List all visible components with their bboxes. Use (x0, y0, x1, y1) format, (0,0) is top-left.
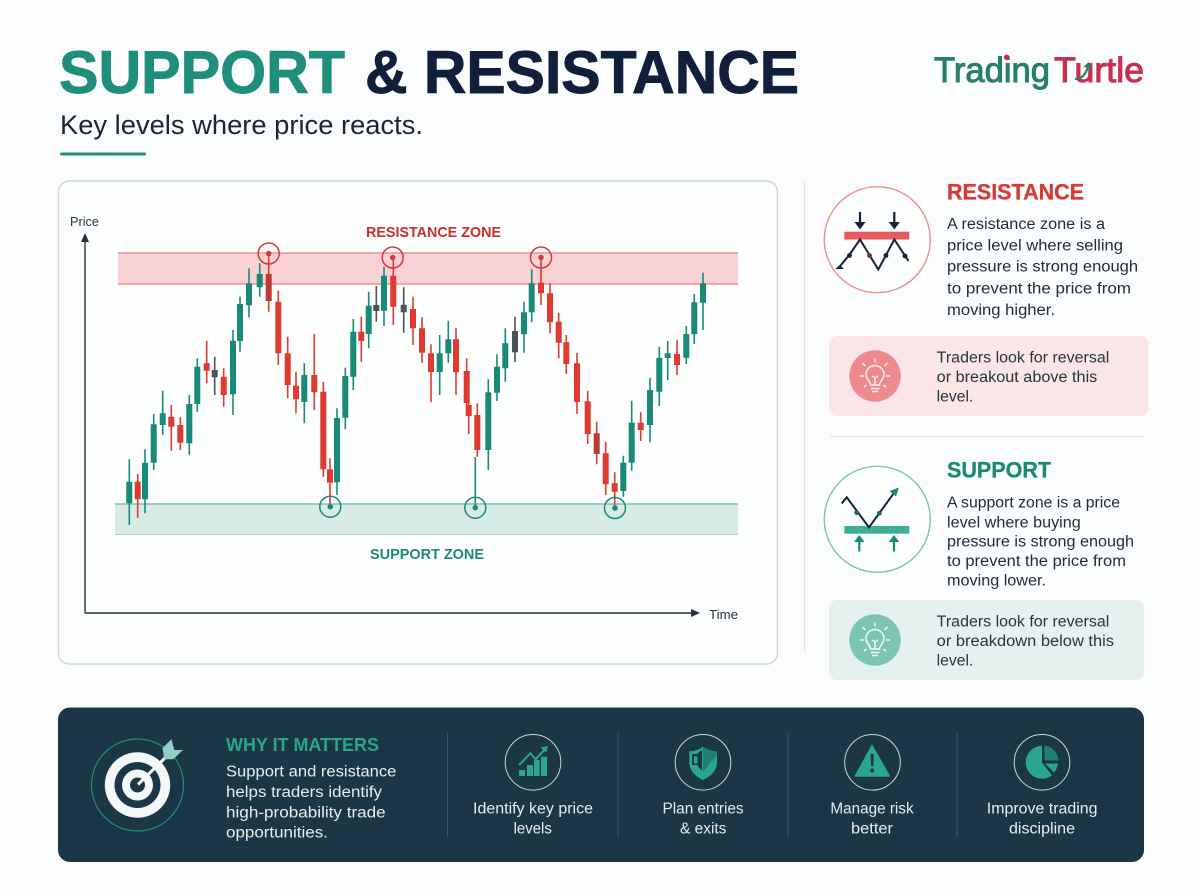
text: support definition (947, 495, 1134, 589)
callout: support tip: Traders look for reversal (937, 614, 1109, 631)
text: resistance definition: to prevent the price from (947, 280, 1131, 297)
icon: resistance diagram (824, 187, 930, 293)
panel: why it matters (58, 708, 1144, 862)
text: resistance definition: A resistance zone is a (947, 216, 1105, 233)
logo: Trading Turtle: Turtle (1054, 51, 1144, 90)
callout: support tip: or breakdown below this (937, 633, 1114, 650)
section divider (830, 436, 1144, 438)
text: why it matters: high-probability trade (226, 804, 386, 821)
axes (81, 233, 700, 617)
benefit: improve trading discipline: Improve trading (987, 800, 1098, 817)
text: resistance definition: moving higher. (947, 302, 1055, 319)
title: & RESISTANCE (365, 39, 799, 106)
icon: support diagram (824, 466, 930, 572)
icon: rising bars (505, 734, 561, 790)
candlesticks (126, 253, 706, 525)
benefit: identify key price levels (473, 734, 593, 837)
benefit: improve trading discipline (987, 734, 1098, 837)
text: why it matters: opportunities. (226, 824, 328, 841)
title: SUPPORT (59, 39, 345, 106)
icon: warning triangle (845, 734, 900, 790)
text: why it matters: Support and resistance (226, 764, 396, 781)
text: resistance definition: pressure is strong enough (947, 259, 1138, 276)
callout: support tip: level. (937, 653, 973, 670)
logo: Trading Turtle (934, 51, 1144, 90)
support touch markers (320, 496, 626, 518)
text: why it matters: helps traders identify (226, 784, 382, 801)
benefit: plan entries and exits: Plan entries (662, 800, 744, 817)
benefit: plan entries and exits (662, 734, 744, 837)
benefit: identify key price levels: levels (514, 820, 552, 837)
text: resistance definition (947, 216, 1138, 319)
subtitle: Key levels where price reacts. (60, 110, 423, 140)
callout: support tip (829, 600, 1144, 680)
benefit: manage risk better (830, 734, 914, 837)
panel divider (804, 182, 806, 652)
axis label: time: Time (709, 607, 738, 622)
axis label: price: Price (70, 214, 99, 229)
callout: resistance tip: Traders look for reversal (937, 349, 1109, 366)
callout: resistance tip: level. (937, 389, 973, 406)
heading: resistance: RESISTANCE (947, 180, 1084, 204)
benefit: manage risk better: better (851, 820, 893, 837)
text: support definition: to prevent the price from (947, 553, 1126, 570)
panel: resistance (824, 180, 1148, 416)
text: why it matters (226, 764, 396, 841)
icon: shield (675, 734, 731, 790)
icon: light bulb (849, 350, 901, 402)
text: support definition: moving lower. (947, 572, 1046, 589)
callout: resistance tip: or breakout above this (937, 369, 1098, 386)
icon: pie chart (1014, 734, 1070, 790)
heading: support: SUPPORT (947, 458, 1052, 483)
title (59, 39, 799, 106)
logo: Trading Turtle: Trading (934, 51, 1050, 90)
title underline (60, 152, 146, 156)
heading: why it matters: WHY IT MATTERS (226, 734, 379, 755)
benefit: plan entries and exits: & exits (680, 820, 727, 837)
icon: target with arrow (92, 739, 184, 831)
icon: light bulb (849, 614, 901, 666)
label: resistance zone: RESISTANCE ZONE (366, 224, 501, 241)
text: support definition: pressure is strong enough (947, 534, 1134, 551)
callout: resistance tip (829, 336, 1148, 416)
resistance touch markers (258, 243, 552, 268)
text: resistance definition: price level where selling (947, 237, 1123, 254)
label: support zone: SUPPORT ZONE (370, 546, 484, 563)
benefit: identify key price levels: Identify key price (473, 800, 593, 817)
text: support definition: A support zone is a price (947, 495, 1120, 512)
panel: support (824, 458, 1144, 680)
text: support definition: level where buying (947, 514, 1081, 531)
benefit: manage risk better: Manage risk (830, 800, 914, 817)
benefit: improve trading discipline: discipline (1009, 820, 1075, 837)
resistance zone band (118, 252, 738, 284)
support zone band (115, 504, 738, 534)
panel: price chart (58, 181, 778, 664)
